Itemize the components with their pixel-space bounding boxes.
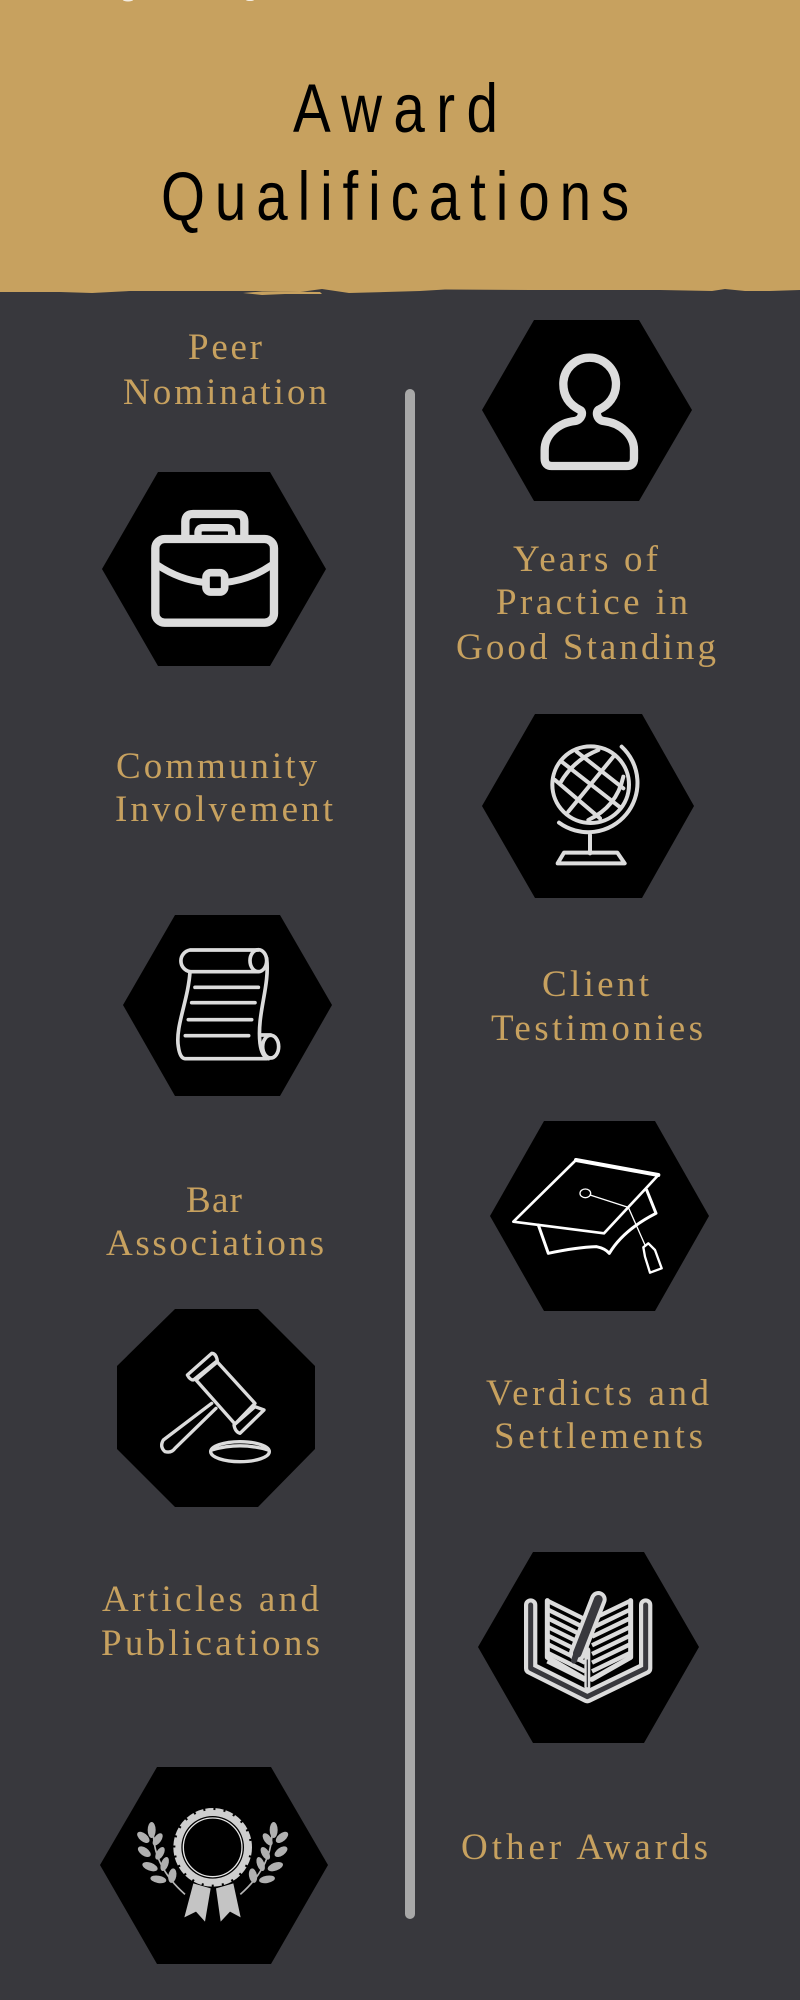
label: Peer Nomination: Peer bbox=[188, 327, 262, 368]
icon: person bbox=[482, 320, 692, 501]
icon: briefcase bbox=[102, 472, 326, 666]
center divider bbox=[405, 389, 415, 1919]
title bbox=[161, 71, 629, 235]
title: Award bbox=[293, 71, 498, 147]
header banner with torn edge bbox=[0, 0, 800, 295]
label: Client Testimonies: Client bbox=[542, 964, 650, 1005]
label: Articles and Publications: Publications bbox=[101, 1623, 320, 1664]
label: Verdicts and Settlements: Settlements bbox=[494, 1416, 703, 1457]
icon: graduation cap bbox=[490, 1121, 709, 1311]
label: Peer Nomination: Nomination bbox=[123, 372, 327, 413]
label: Client Testimonies: Testimonies bbox=[491, 1008, 703, 1049]
label: Years of Practice in Good Standing: Practice in bbox=[496, 582, 688, 623]
label: Bar Associations: Associations bbox=[106, 1223, 324, 1264]
icon: gavel bbox=[117, 1309, 315, 1507]
label: Bar Associations: Bar bbox=[186, 1180, 242, 1221]
label: Years of Practice in Good Standing: Years of bbox=[513, 539, 659, 580]
icon: scroll bbox=[123, 915, 332, 1096]
icon: globe bbox=[482, 714, 694, 898]
label: Community Involvement: Community bbox=[116, 746, 318, 787]
label: Community Involvement: Involvement bbox=[115, 789, 334, 830]
label: Peer Nomination bbox=[123, 327, 327, 413]
label: Articles and Publications: Articles and bbox=[102, 1579, 320, 1620]
label: Bar Associations bbox=[106, 1180, 324, 1264]
label: Years of Practice in Good Standing: Good Standing bbox=[456, 627, 716, 668]
label: Verdicts and Settlements: Verdicts and bbox=[486, 1373, 710, 1414]
label: Years of Practice in Good Standing bbox=[456, 539, 716, 668]
label: Other Awards: Other Awards bbox=[461, 1827, 708, 1868]
label: Community Involvement bbox=[115, 746, 334, 830]
label: Verdicts and Settlements bbox=[486, 1373, 710, 1457]
label: Articles and Publications bbox=[101, 1579, 320, 1664]
label: Client Testimonies bbox=[491, 964, 703, 1049]
icon: open book with pen bbox=[478, 1552, 699, 1743]
icon: award ribbon with laurels bbox=[100, 1767, 328, 1964]
title: Qualifications bbox=[161, 159, 629, 235]
